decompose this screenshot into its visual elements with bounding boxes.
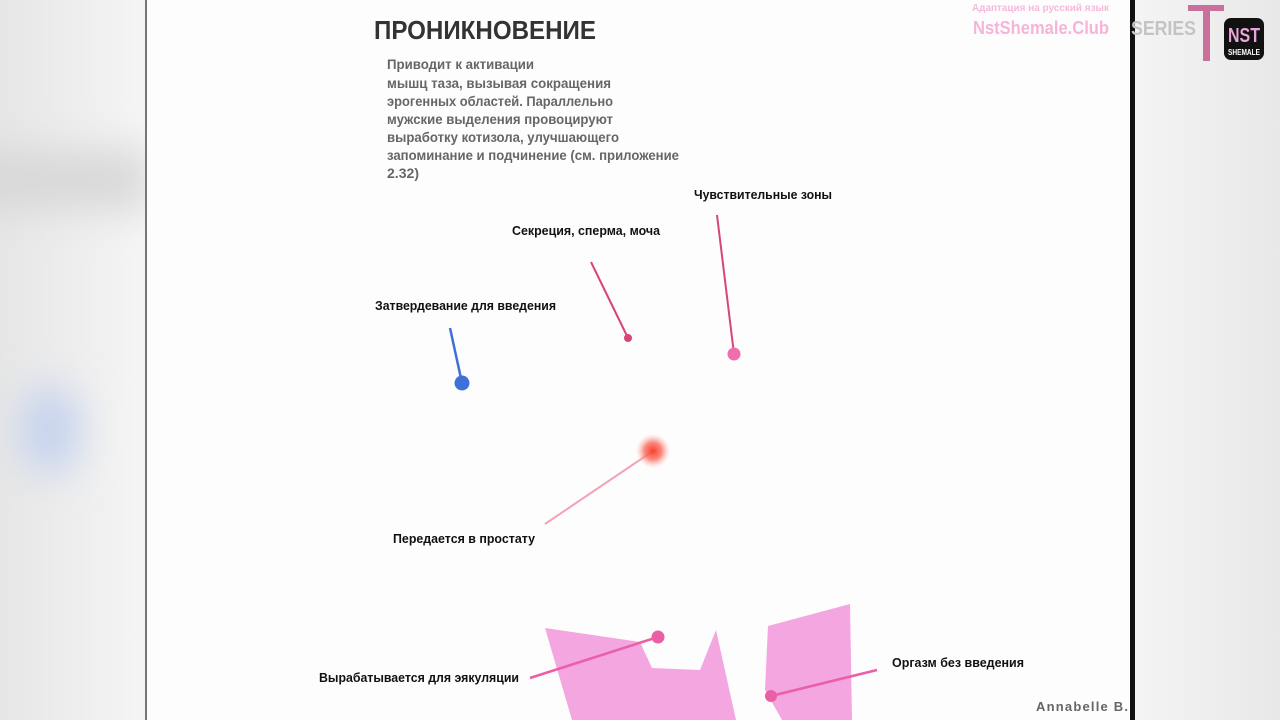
- panel: white page: [145, 0, 1135, 720]
- callout: produced for ejaculation: Вырабатывается для эякуляции: [319, 670, 519, 685]
- body text block: запоминание и подчинение (см. приложение: [387, 147, 679, 163]
- body text block: мышц таза, вызывая сокращения: [387, 75, 611, 91]
- body text block: мужские выделения провоцируют: [387, 111, 613, 127]
- callout: secretion: Секреция, сперма, моча: [512, 223, 661, 238]
- pink colour blocks: [545, 604, 852, 720]
- watermark: adaptation credit: [972, 3, 1110, 38]
- blurred right side background: [1135, 0, 1280, 720]
- title: ПРОНИКНОВЕНИЕ: [374, 15, 596, 45]
- blurred left side background: [0, 0, 150, 720]
- callout: transmitted to the prostate: [393, 434, 670, 546]
- logo: series badge: [1131, 5, 1264, 61]
- body text block: 2.32): [387, 165, 419, 181]
- watermark: adaptation credit: Адаптация на русский язык: [972, 3, 1110, 14]
- callout: hardening: [375, 298, 556, 390]
- callout: sensitive zones: [694, 187, 832, 360]
- logo: series badge: SHEMALE: [1228, 48, 1261, 57]
- watermark: adaptation credit: NstShemale.Club: [973, 18, 1109, 38]
- callout: orgasm without penetration: Оргазм без введения: [892, 655, 1024, 670]
- callout: sensitive zones: Чувствительные зоны: [694, 187, 832, 202]
- logo: series badge: NST: [1228, 25, 1260, 47]
- callout: orgasm without penetration: [765, 655, 1024, 702]
- callout: transmitted to the prostate: Передается в простату: [393, 531, 536, 546]
- body text block: Приводит к активации: [387, 56, 534, 72]
- callout: hardening: Затвердевание для введения: [375, 298, 556, 313]
- body text block: эрогенных областей. Параллельно: [387, 93, 613, 109]
- body text block: выработку котизола, улучшающего: [387, 129, 619, 145]
- body text block: [387, 56, 679, 181]
- callout: secretion: [512, 223, 661, 342]
- logo: series badge: SERIES: [1131, 18, 1196, 40]
- artist signature: Annabelle B.: [1036, 699, 1128, 714]
- callout: produced for ejaculation: [319, 630, 664, 685]
